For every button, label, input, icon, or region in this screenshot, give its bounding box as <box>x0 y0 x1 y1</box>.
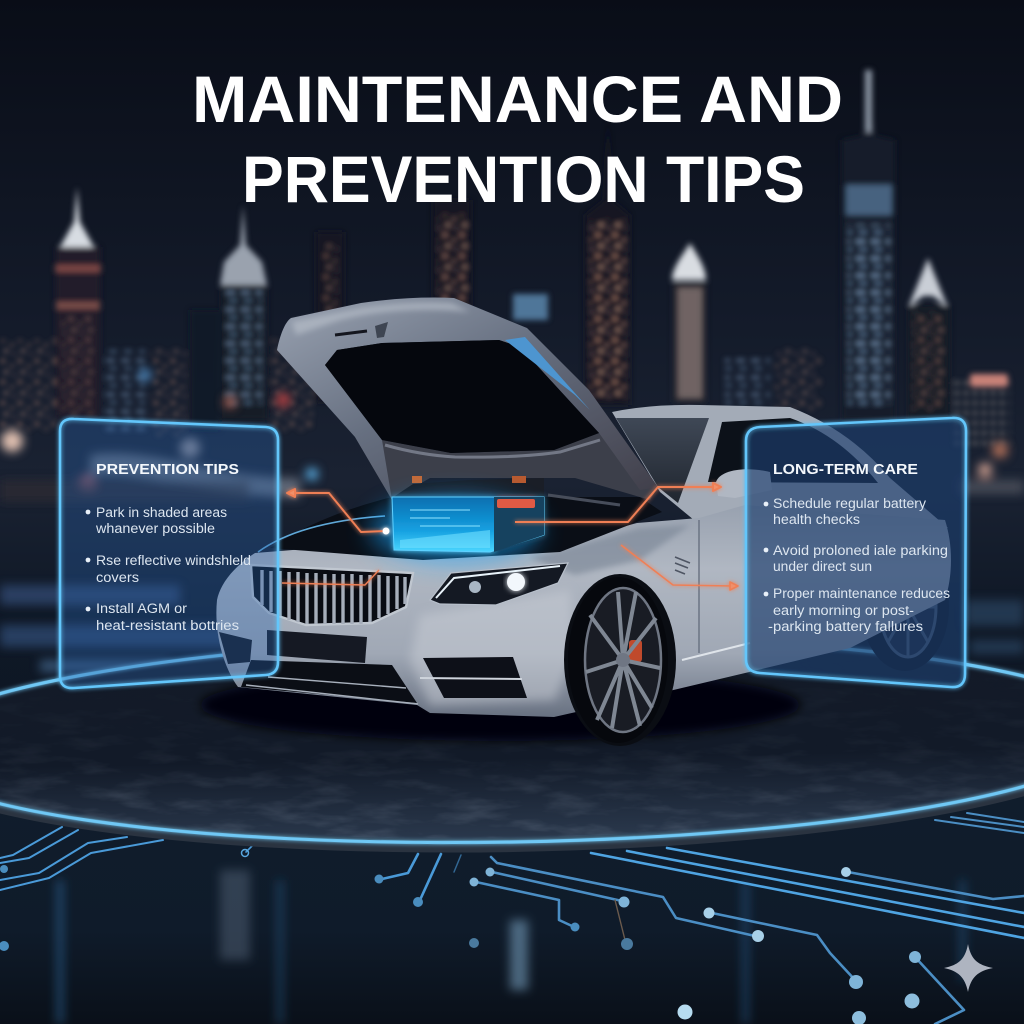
tip 2 <box>86 553 251 585</box>
blurred ground lights <box>0 585 1024 672</box>
right traces <box>615 813 1024 1024</box>
left traces <box>0 827 163 890</box>
front wheel <box>564 574 676 746</box>
panel heading: PREVENTION TIPS <box>96 462 239 478</box>
fender shading <box>530 525 690 575</box>
grille line <box>282 570 379 585</box>
lower floor <box>0 790 1024 1024</box>
care item 3: early morning or post- <box>773 603 914 618</box>
windshield <box>616 418 709 503</box>
tip 1: Park in shaded areas <box>96 505 227 520</box>
arrow to prevention panel <box>287 489 390 534</box>
tip 2: covers <box>96 570 139 585</box>
bumper highlight <box>410 590 575 705</box>
glass panel frame <box>746 418 966 687</box>
hood outer frame <box>277 298 658 500</box>
blurred city skyline <box>0 68 1010 445</box>
car body <box>216 505 951 717</box>
arrow along door <box>621 545 738 590</box>
side windows <box>708 418 878 483</box>
roof and pillars <box>612 405 948 528</box>
circuit traces on the floor <box>0 813 1024 1024</box>
circular platform with glowing ring <box>0 625 1024 863</box>
hood inner crease highlight <box>385 440 600 457</box>
battery glow halo <box>370 496 540 564</box>
care item 3: -parking battery fallures <box>768 619 923 634</box>
door seam and sill <box>675 520 750 660</box>
building tall dark <box>316 232 344 402</box>
care item 2: Avoid proloned iale parking <box>773 543 948 558</box>
hood opening <box>325 340 599 453</box>
centre short traces <box>246 844 461 900</box>
licence plate <box>267 630 367 663</box>
icon: sparkle watermark <box>944 944 993 992</box>
hood latch and blue reflection <box>335 322 590 410</box>
building far right <box>908 258 950 420</box>
care item 1: health checks <box>773 512 860 527</box>
bokeh lights along the horizon <box>0 369 1024 502</box>
arrow to mirror and long-term panel <box>515 483 721 522</box>
centre right traces <box>476 857 855 980</box>
left intake <box>219 632 252 664</box>
building left <box>220 205 267 420</box>
door mirror <box>716 469 772 498</box>
tip 3 <box>86 601 239 633</box>
rear wheel <box>861 543 949 671</box>
small blue building <box>513 294 548 320</box>
panel: long-term care <box>746 418 966 687</box>
tip 1 <box>86 505 227 536</box>
care item 2: under direct sun <box>773 559 872 574</box>
title line 2: PREVENTION TIPS <box>242 142 805 216</box>
tip 2: Rse reflective windshleld <box>96 553 251 568</box>
battery top <box>392 476 620 505</box>
care item 3 <box>764 586 950 634</box>
lower city blocks <box>0 310 1010 445</box>
care item 1 <box>764 496 926 527</box>
panel heading: LONG-TERM CARE <box>773 462 918 478</box>
building centre <box>433 200 471 350</box>
side air intake <box>420 657 527 698</box>
platform surface <box>0 627 1024 849</box>
title line 1: MAINTENANCE AND <box>192 62 843 136</box>
hood top highlight <box>292 303 470 335</box>
tall tower right <box>842 68 895 420</box>
headlight <box>430 563 568 605</box>
hood underside <box>355 433 658 500</box>
panel: prevention tips <box>60 419 278 688</box>
glowing battery <box>392 497 544 552</box>
vertical floor reflections <box>57 870 965 1024</box>
care item 1: Schedule regular battery <box>773 496 926 511</box>
platform outer rim <box>0 625 1024 863</box>
care item 2 <box>764 543 948 574</box>
fender rim light <box>258 516 385 552</box>
car <box>216 298 951 746</box>
orange callout arrows <box>282 483 738 590</box>
platform worn texture <box>4 751 1024 838</box>
tip 1: whanever possible <box>95 521 215 536</box>
circuit node dots <box>0 850 921 1024</box>
pink sign <box>970 374 1008 387</box>
glass panel frame <box>60 419 278 688</box>
glowing ring <box>0 627 1024 853</box>
tip 3: heat-resistant bottries <box>96 618 239 633</box>
grille <box>251 565 413 625</box>
car shadow <box>200 669 800 741</box>
title <box>192 62 843 216</box>
building far left <box>55 187 101 417</box>
building centre tall <box>585 120 630 405</box>
lower grille <box>241 660 418 704</box>
engine bay <box>270 497 662 560</box>
long bundle traces <box>591 848 1024 938</box>
care item 3: Proper maintenance reduces <box>773 586 950 601</box>
building with white cap <box>672 243 706 402</box>
tip 3: Install AGM or <box>96 601 188 616</box>
